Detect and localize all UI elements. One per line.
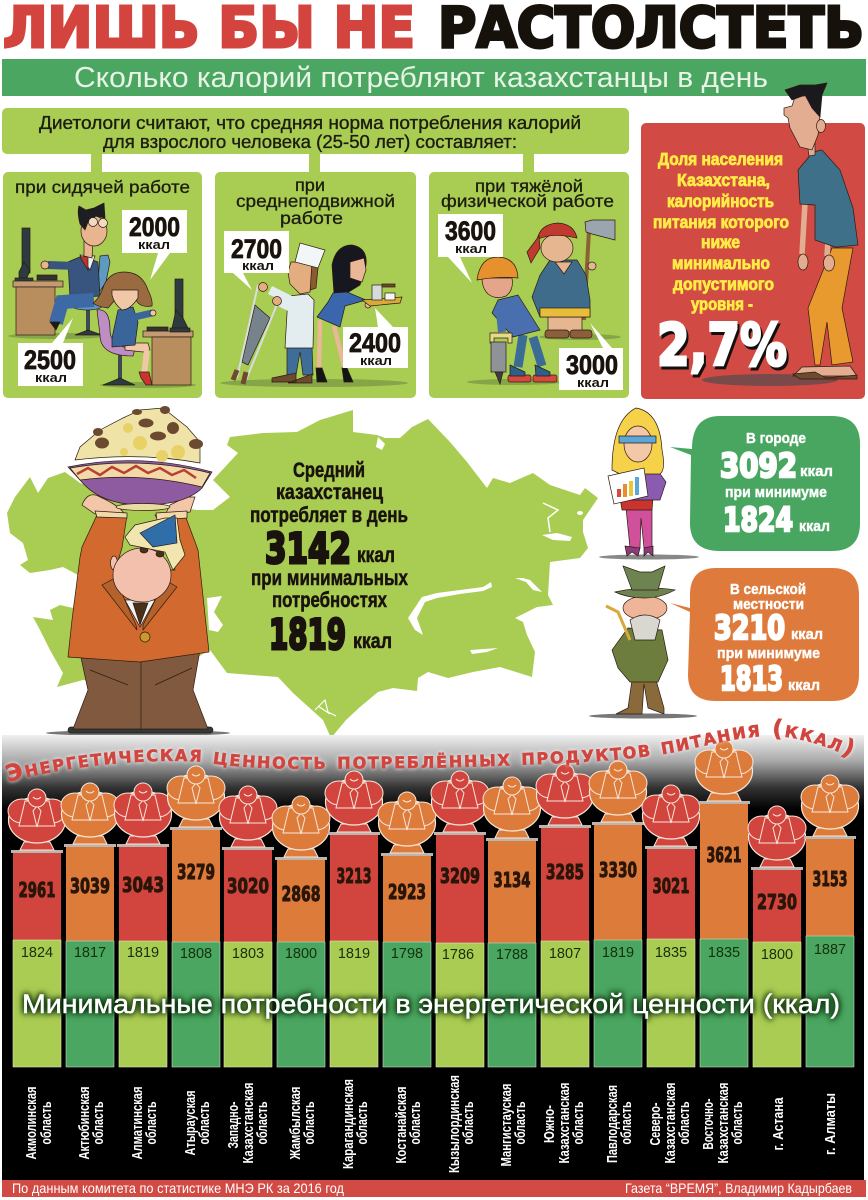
callout: 2000 kcal: ккал: [138, 238, 170, 252]
bar: Карагандинская: 1819: [338, 946, 370, 962]
bar: Жамбылская: 1800: [285, 946, 317, 962]
bar: Мангистауская: 1788: [496, 947, 528, 963]
callout: rural: ккал: [791, 626, 823, 643]
text: average consumption: 3142: [265, 524, 351, 573]
bar: Алматинская: 3043: [122, 873, 164, 897]
text: share of population: уровня -: [691, 294, 753, 314]
callout: 3600 kcal: 3600: [445, 216, 496, 246]
callout: 2400 kcal: 2400: [349, 328, 401, 358]
panel: dietitians intro: [2, 108, 629, 172]
region labels: область: [196, 1102, 213, 1144]
illustration: doctor with stretcher: [220, 243, 408, 387]
bar: Павлодарская: 1819: [602, 945, 634, 961]
bar: Кызылординская: 1786: [442, 947, 474, 963]
region labels: Казахстанская: [715, 1082, 732, 1164]
text: average consumption: Средний: [293, 459, 365, 482]
text: average consumption: ккал: [353, 630, 392, 653]
bar: Астана: 1800: [761, 947, 793, 963]
callout: 3000 kcal: [559, 323, 623, 390]
bar: Жамбылская: 2868: [282, 882, 320, 906]
text: share of population: ниже: [701, 232, 740, 252]
bar: Южно-Казахстанская: 1807: [549, 946, 581, 962]
bar: Костанайская: 1798: [391, 946, 423, 962]
callout: rural: В сельской: [730, 581, 806, 598]
bar: Южно-Казахстанская: [536, 764, 594, 1067]
text: average consumption: [250, 459, 408, 659]
chart background: [2, 735, 864, 1180]
bar: Западно-Казахстанская: 3020: [227, 874, 269, 898]
heading: moderately active: работе: [280, 208, 343, 228]
heading: heavy work: [441, 176, 614, 211]
callout: rural: местности: [733, 596, 804, 613]
text: share of population: Доля населения: [658, 149, 783, 169]
signature mark: [315, 700, 336, 716]
footer: По данным комитета по статистике МНЭ РК за 2016 год: [12, 1180, 344, 1196]
bar: Алматы: [801, 775, 859, 1067]
callout: 2400 kcal: [343, 308, 408, 368]
region labels: область: [618, 1102, 635, 1144]
callout: city: 1824: [723, 500, 793, 539]
region labels: Жамбылская: [287, 1086, 304, 1160]
text: average consumption: ккал: [357, 544, 395, 567]
map of Kazakhstan: [7, 410, 598, 738]
bar: Западно-Казахстанская: 1803: [232, 946, 264, 962]
illustration: city woman with chart: [599, 408, 699, 560]
callout: rural: 1813: [720, 659, 783, 698]
illustration: worker with jackhammer: [467, 257, 563, 385]
region labels: Актюбинская: [76, 1086, 93, 1160]
callout: rural: ккал: [788, 677, 820, 694]
callout: 3000 kcal: 3000: [566, 350, 618, 380]
subtitle band: Сколько калорий потребляют казахстанцы в день: [74, 62, 768, 94]
callout: 2500 kcal: [18, 318, 83, 386]
region labels: область: [407, 1102, 424, 1144]
callout: 2700 kcal: 2700: [231, 234, 282, 264]
region labels: [23, 1075, 839, 1173]
callout: city: В городе: [746, 430, 806, 447]
callout: city: [670, 416, 860, 551]
region labels: Казахстанская: [556, 1082, 573, 1164]
bar: Западно-Казахстанская: [219, 786, 277, 1067]
bar: Карагандинская: [325, 771, 383, 1067]
callout: city: 3092: [720, 446, 797, 485]
callout: 2700 kcal: [224, 231, 289, 290]
callout: city: ккал: [799, 518, 830, 535]
subtitle band: [2, 59, 866, 96]
text: average consumption: казахстанец: [276, 481, 383, 504]
callout: 2500 kcal: 2500: [24, 345, 76, 375]
bar: Актюбинская: 1817: [74, 945, 106, 961]
bar: Восточно-Казахстанская: [695, 740, 753, 1067]
callout: 3600 kcal: ккал: [455, 242, 487, 256]
callout: city: при минимуме: [725, 484, 827, 501]
callout: rural: 3210: [714, 608, 785, 647]
region labels: область: [301, 1102, 318, 1144]
bar: Актюбинская: 3039: [70, 874, 110, 898]
heading: moderately active: при: [295, 175, 325, 195]
heading: moderately active: среднеподвижной: [236, 191, 395, 211]
callout: 2500 kcal: ккал: [35, 371, 67, 385]
panel: dietitians intro: для взрослого человека (25-50 лет) составляет:: [103, 131, 517, 152]
text: share of population: [653, 149, 789, 314]
bar: Алматы: 1887: [814, 942, 846, 958]
bar: Северо-Казахстанская: 3021: [652, 874, 690, 898]
bar: Атырауская: 3279: [177, 860, 215, 884]
bar chart: calories by region: [8, 740, 859, 1067]
region labels: область: [90, 1102, 107, 1144]
illustration: woman at desk: [93, 272, 196, 388]
region labels: область: [460, 1102, 477, 1144]
bar: Восточно-Казахстанская: 1835: [708, 945, 740, 961]
callout: 3000 kcal: ккал: [577, 376, 609, 390]
region labels: Казахстанская: [240, 1082, 257, 1164]
bar: Алматинская: [114, 783, 172, 1067]
bar: Атырауская: [167, 766, 225, 1067]
chart subtitle: minimum needs: Минимальные потребности в энергетической ценности (ккал): [22, 989, 840, 1019]
region labels: Костанайская: [393, 1086, 410, 1164]
region labels: Атырауская: [182, 1090, 199, 1156]
bar: Южно-Казахстанская: 3285: [546, 860, 584, 884]
text: average consumption: при минимальных: [251, 567, 408, 590]
region labels: Кызылординская: [446, 1075, 463, 1173]
callout: 3600 kcal: [438, 214, 503, 283]
region labels: Западно-: [225, 1102, 242, 1148]
heading: heavy work: при тяжёлой: [475, 176, 583, 196]
bar: Акмолинская: [8, 789, 66, 1067]
bar: Акмолинская: 2961: [18, 878, 56, 902]
bar: Мангистауская: 3134: [494, 868, 530, 892]
text: share of population: Казахстана,: [677, 170, 770, 190]
bar: Восточно-Казахстанская: 3621: [706, 843, 742, 867]
region labels: область: [570, 1102, 587, 1144]
bar: Астана: [748, 806, 806, 1067]
panel: dietitians intro: Диетологи считают, что средняя норма потребления калорий: [39, 112, 581, 133]
callout: 2700 kcal: ккал: [242, 259, 274, 273]
region labels: область: [354, 1102, 371, 1144]
region labels: Мангистауская: [498, 1084, 515, 1166]
callout: 2000 kcal: 2000: [129, 212, 180, 242]
region labels: Акмолинская: [23, 1086, 40, 1160]
bar: Павлодарская: 3330: [599, 858, 637, 882]
bar: Актюбинская: [61, 783, 119, 1067]
footer: [2, 1180, 866, 1197]
illustration: man at desk: [8, 203, 110, 339]
panel: heavy physical work: [429, 172, 629, 398]
region labels: г. Астана: [770, 1097, 787, 1150]
bar: Алматинская: 1819: [127, 945, 159, 961]
bar: Северо-Казахстанская: [642, 785, 700, 1067]
text: share of population: питания которого: [653, 212, 789, 232]
bar: Астана: 2730: [757, 890, 797, 914]
region labels: область: [512, 1102, 529, 1144]
heading: moderately active: [236, 175, 395, 228]
callout: 2000 kcal: [122, 210, 187, 280]
bar: Кызылординская: [431, 771, 489, 1067]
region labels: область: [254, 1102, 271, 1144]
region labels: область: [38, 1102, 55, 1144]
region labels: Южно-: [541, 1105, 558, 1143]
illustration: man holding bowl of food: [46, 406, 230, 736]
figure: 2.7 percent: 2,7%: [657, 311, 787, 379]
region labels: область: [143, 1102, 160, 1144]
panel: moderately active work: [215, 172, 416, 398]
heading: sedentary: при сидячей работе: [15, 177, 190, 197]
text: share of population: минимально: [672, 253, 770, 273]
callout: 2400 kcal: ккал: [360, 354, 392, 368]
bar: Павлодарская: [589, 761, 647, 1067]
panel: sedentary work: [3, 172, 202, 398]
text: average consumption: 1819: [269, 610, 346, 659]
region labels: Алматинская: [129, 1086, 146, 1160]
bar: Карагандинская: 3213: [336, 864, 372, 888]
illustration: woman with axe: [527, 220, 621, 340]
bar: Мангистауская: [483, 777, 541, 1067]
bar: Костанайская: 2923: [388, 880, 426, 904]
callout: rural: при минимуме: [717, 645, 820, 662]
text: share of population: допустимого: [673, 274, 774, 294]
bar: Алматы: 3153: [812, 867, 848, 891]
region labels: область: [676, 1102, 693, 1144]
text: share of population: калорийность: [667, 191, 774, 211]
bar: Костанайская: [378, 792, 436, 1067]
region labels: область: [729, 1102, 746, 1144]
bar: Жамбылская: [272, 796, 330, 1067]
title: [3, 0, 864, 61]
heading: heavy work: физической работе: [441, 191, 614, 211]
callout: city: ккал: [800, 463, 833, 480]
region labels: г. Алматы: [822, 1093, 839, 1155]
region labels: Казахстанская: [662, 1082, 679, 1164]
illustration: thin man: [702, 83, 858, 386]
region labels: Восточно-: [700, 1098, 717, 1150]
bar: Кызылординская: 3209: [440, 864, 480, 888]
bar: Акмолинская: 1824: [21, 945, 53, 961]
text: average consumption: потребляет в день: [250, 504, 408, 527]
region labels: Карагандинская: [340, 1079, 357, 1169]
bar: Атырауская: 1808: [180, 946, 212, 962]
panel: share below minimum: [641, 123, 865, 399]
chart title: Энергетическая ценность потреблённых продуктов питания (ккал): [3, 718, 854, 784]
illustration: waitress with tray: [316, 245, 402, 382]
illustration: rural man with wheat: [589, 566, 697, 718]
region labels: Павлодарская: [604, 1085, 621, 1163]
region labels: Северо-: [647, 1102, 664, 1146]
text: average consumption: потребностях: [272, 589, 387, 612]
bar: Северо-Казахстанская: 1835: [655, 945, 687, 961]
callout: rural: [670, 568, 859, 701]
